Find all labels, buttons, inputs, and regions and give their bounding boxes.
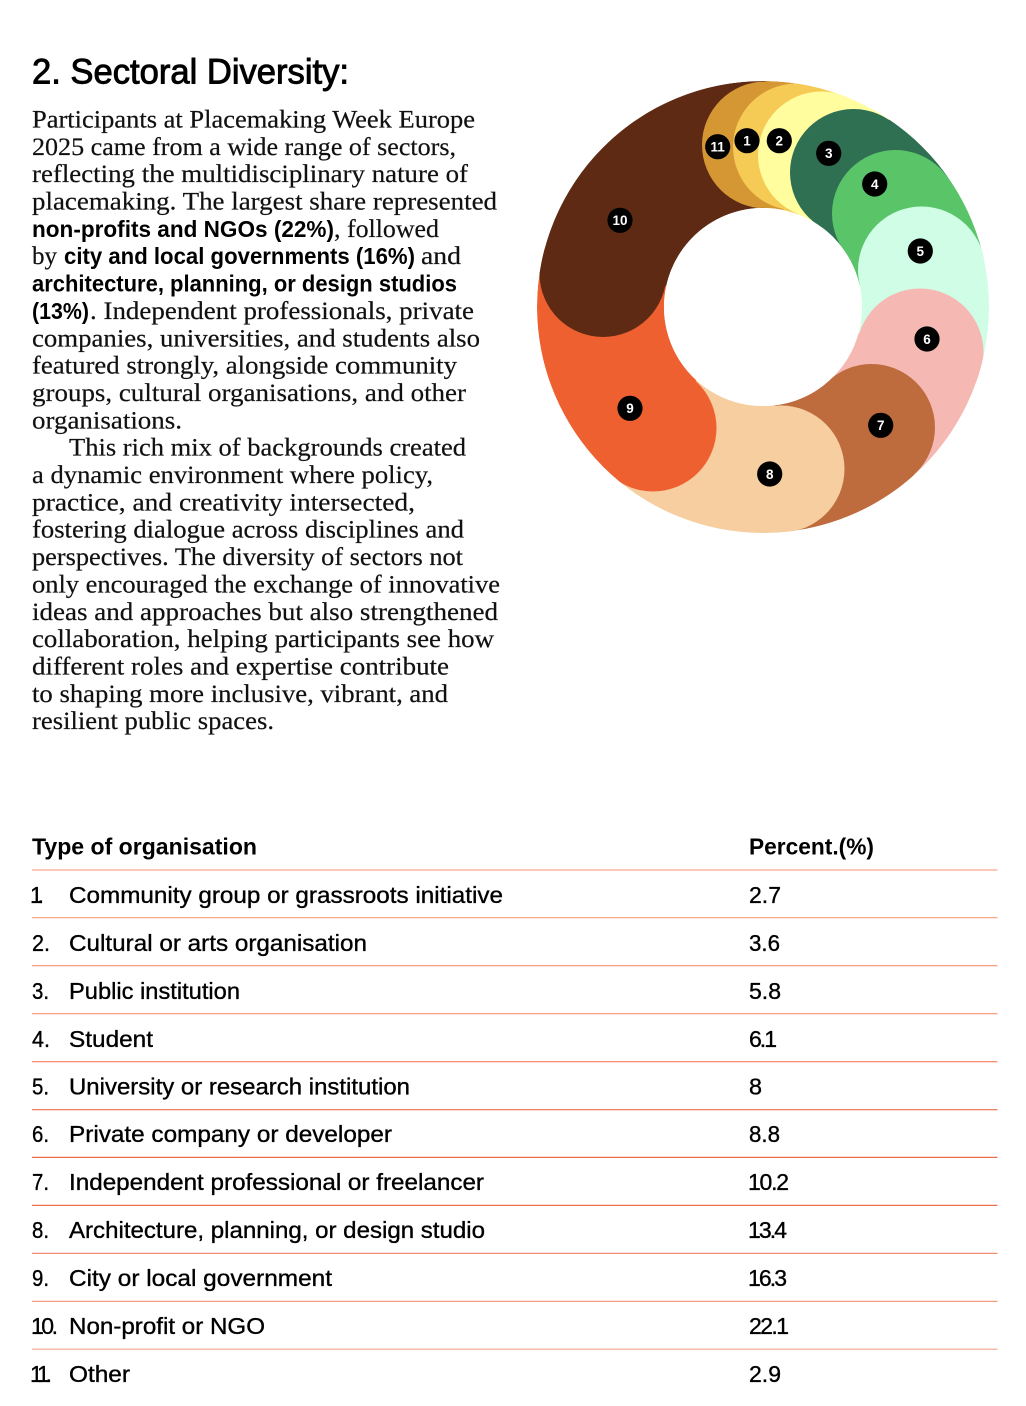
row 11 <box>30 1361 781 1387</box>
row 10 <box>31 1313 789 1339</box>
segment 3: public institution <box>790 109 949 250</box>
segment 10: non-profit <box>542 81 769 286</box>
row 6: 8.8 <box>749 1121 780 1147</box>
text block: description: reflecting the multidisciplinary nature of <box>32 161 469 188</box>
chart number badges: 1 <box>743 134 751 148</box>
segment 8: architecture studio <box>611 380 844 533</box>
row 5 <box>32 1073 762 1099</box>
segment 5: university <box>858 206 989 358</box>
text block: description <box>32 106 500 735</box>
row 5: 8 <box>749 1073 762 1099</box>
row 11: Other <box>69 1361 130 1387</box>
row 5: 5. <box>32 1073 49 1099</box>
text block: description: architecture, planning, or design studios <box>32 271 457 297</box>
text block: description: practice, and creativity intersected, <box>32 489 415 516</box>
row 10: Non-profit or NGO <box>69 1313 265 1339</box>
row 6 <box>32 1121 780 1147</box>
row 11: 2.9 <box>749 1361 781 1387</box>
row 7: 10.2 <box>748 1169 789 1195</box>
text block: description: only encouraged the exchange of innovative <box>32 571 500 598</box>
row 2 <box>32 930 780 956</box>
segment 6: private company <box>830 288 984 476</box>
row 3: 3. <box>32 978 49 1004</box>
row 1: 1. <box>30 882 44 908</box>
text block: description: companies, universities, and students also <box>32 325 480 352</box>
segment 4: student <box>832 150 984 286</box>
text block: description: resilient public spaces. <box>32 708 274 735</box>
chart number badges: 8 <box>766 467 774 482</box>
row 4: 6.1 <box>749 1026 777 1052</box>
chart number badges: 4 <box>871 177 879 192</box>
row 7 <box>32 1169 789 1195</box>
text block: description: (13%) <box>32 298 89 324</box>
segment 2: cultural organisation <box>758 92 891 225</box>
chart number badges <box>607 128 940 487</box>
row 4: 4. <box>32 1026 50 1052</box>
text block: description: organisations. <box>32 407 182 434</box>
segment 9: city government <box>537 259 716 492</box>
row 4: Student <box>69 1026 154 1052</box>
text block: description: 2025 came from a wide range of sectors, <box>32 134 456 161</box>
chart number badges: 7 <box>877 418 884 433</box>
row 1: 2.7 <box>749 882 781 908</box>
text block: description: groups, cultural organisations, and other <box>32 380 467 407</box>
chart number badges: 6 <box>923 332 931 347</box>
chart number badges: 5 <box>917 244 925 259</box>
row 8: 8. <box>32 1217 49 1243</box>
table header <box>32 834 874 860</box>
row 3 <box>32 978 781 1004</box>
text block: description: This rich mix of backgrounds created <box>69 435 467 462</box>
row 2: 3.6 <box>749 930 780 956</box>
text block: description: non-profits and NGOs (22%) <box>32 216 334 242</box>
row 6: 6. <box>32 1121 49 1147</box>
row 9: City or local government <box>69 1265 333 1291</box>
segment 10: rounded start cap <box>540 247 666 337</box>
row 11: 11. <box>30 1361 52 1387</box>
text block: description: featured strongly, alongside community <box>32 353 458 380</box>
text block: description: different roles and expertise contribute <box>32 654 449 680</box>
chart number badges: 11 <box>711 140 725 154</box>
row 9: 9. <box>32 1265 49 1291</box>
row 1: Community group or grassroots initiative <box>69 882 503 908</box>
row 9 <box>32 1265 787 1291</box>
chart number badges: 9 <box>626 401 634 416</box>
row 10: 10. <box>31 1313 58 1339</box>
text block: description: placemaking. The largest share represented <box>32 188 498 216</box>
row 8 <box>32 1217 787 1243</box>
table header: Type of organisation <box>32 834 257 860</box>
chart number badges: 10 <box>612 213 628 228</box>
text block: description: by <box>32 243 58 270</box>
segment 1: community group <box>733 84 846 215</box>
table header: Percent.(%) <box>749 834 874 860</box>
text block: description: Participants at Placemaking Week Europe <box>32 106 475 134</box>
row 10: 22.1 <box>749 1313 789 1339</box>
chart number badges: 3 <box>825 146 833 161</box>
row 7: 7. <box>32 1169 49 1195</box>
row 7: Independent professional or freelancer <box>69 1169 484 1195</box>
text block: description: and <box>421 243 462 270</box>
row 2: 2. <box>32 930 50 956</box>
row 9: 16.3 <box>748 1265 787 1291</box>
chart number badges: 2 <box>776 134 783 148</box>
text block: description: . Independent professionals, private <box>90 298 474 325</box>
donut chart <box>533 77 993 537</box>
row 5: University or research institution <box>69 1073 410 1099</box>
row 2: Cultural or arts organisation <box>69 930 367 956</box>
text block: description: ideas and approaches but also strengthened <box>32 599 499 626</box>
text block: description: fostering dialogue across disciplines and <box>32 517 465 544</box>
segment 11: other <box>702 81 812 210</box>
row 4 <box>32 1026 777 1052</box>
row 8: Architecture, planning, or design studio <box>69 1217 485 1243</box>
row 3: 5.8 <box>749 978 781 1004</box>
text block: description: city and local governments (16%) <box>64 243 415 269</box>
text block: description: , followed <box>334 216 440 243</box>
row 1 <box>30 882 781 908</box>
table: type of organisation <box>30 834 998 1387</box>
row 8: 13.4 <box>748 1217 787 1243</box>
row 3: Public institution <box>69 978 240 1004</box>
title: 2. Sectoral Diversity: <box>32 52 349 92</box>
segment 7: independent professional <box>774 364 935 532</box>
text block: description: collaboration, helping participants see how <box>32 626 494 653</box>
text block: description: to shaping more inclusive, vibrant, and <box>32 681 449 708</box>
text block: description: perspectives. The diversity of sectors not <box>32 544 463 571</box>
row 6: Private company or developer <box>69 1121 392 1147</box>
text block: description: a dynamic environment where policy, <box>32 462 433 489</box>
